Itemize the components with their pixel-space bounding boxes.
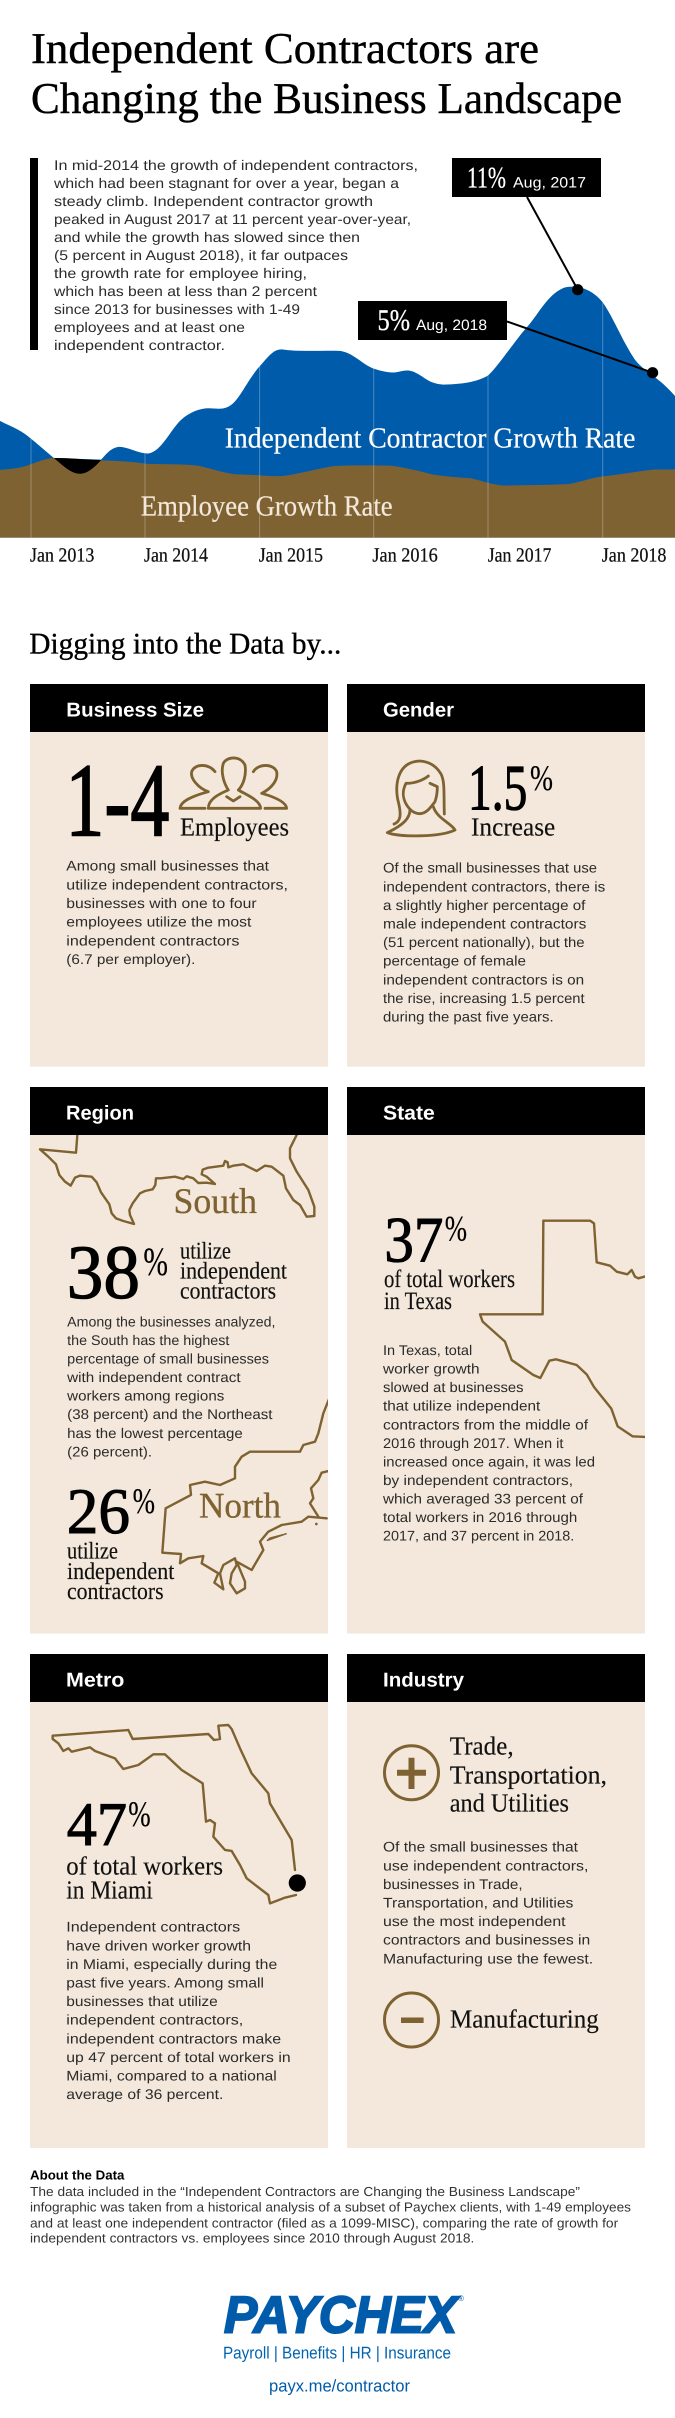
stat: 37%: %	[445, 1209, 467, 1249]
about the data: independent contractors vs. employees since 2010 through August 2018.	[30, 2231, 474, 2246]
panel: industry	[347, 1654, 645, 2148]
body text: Of the small businesses that	[383, 1839, 578, 1855]
body text: the South has the highest	[67, 1332, 230, 1348]
stat: 1-4: 1-4	[65, 742, 169, 859]
x axis labels	[30, 544, 666, 566]
stat: 26%: 26	[67, 1476, 130, 1548]
callout: 5% Aug 2018: 5%	[378, 304, 410, 337]
callout: 11% Aug 2017	[452, 158, 601, 295]
intro text with bar: since 2013 for businesses with 1-49	[54, 301, 300, 317]
body text: use the most independent	[383, 1913, 566, 1929]
icon: miami dot	[289, 1874, 306, 1892]
intro text with bar: which had been stagnant for over a year, began a	[53, 175, 399, 191]
body text: (26 percent).	[67, 1443, 152, 1459]
panel: region	[30, 1087, 330, 1634]
stat: 38%: %	[143, 1239, 168, 1284]
title: Independent Contractors are	[31, 24, 539, 73]
icon: plus circle	[384, 1746, 438, 1800]
body text: employees utilize the most	[66, 914, 252, 930]
stat: 38%: 38	[67, 1229, 140, 1315]
body text	[66, 1313, 275, 1459]
body text: during the past five years.	[383, 1008, 554, 1024]
intro text with bar: peaked in August 2017 at 11 percent year-over-year,	[54, 211, 411, 227]
body text: the rise, increasing 1.5 percent	[383, 990, 585, 1006]
panel: business size	[30, 684, 328, 1067]
body text: businesses in Trade,	[383, 1876, 523, 1892]
x axis labels: Jan 2014	[144, 544, 208, 566]
icon: three people	[180, 758, 287, 808]
body text: independent contractors make	[66, 2030, 281, 2046]
x axis labels: Jan 2016	[372, 544, 438, 566]
about the data: and at least one independent contractor (filed as a 1099-MISC), comparing the rate of growth for	[30, 2215, 619, 2230]
body text: in Miami, especially during the	[66, 1956, 277, 1972]
stat: 1.5%: 1.5	[468, 752, 527, 824]
body text	[66, 1919, 291, 2102]
stat label: utilize: contractors	[180, 1279, 276, 1305]
intro text with bar: employees and at least one	[54, 319, 245, 335]
body text: a slightly higher percentage of	[383, 897, 586, 913]
body text: percentage of small businesses	[67, 1350, 269, 1366]
chart areas	[0, 287, 675, 538]
body text	[382, 1342, 595, 1544]
map label: north: North	[199, 1486, 281, 1526]
body text: 2017, and 37 percent in 2018.	[383, 1528, 574, 1544]
panel: metro	[30, 1654, 328, 2148]
icon: minus circle	[384, 1993, 438, 2047]
panel heading: Industry	[383, 1669, 465, 1691]
stat label: total workers: of total workers	[384, 1266, 515, 1293]
panel heading: Region	[66, 1102, 134, 1124]
stat label: utilize	[67, 1539, 175, 1605]
stat label: increase: Increase	[471, 813, 555, 842]
title: Changing the Business Landscape	[31, 74, 622, 123]
stat label: utilize: utilize	[67, 1539, 118, 1565]
body text: slowed at businesses	[383, 1379, 524, 1395]
body text: worker growth	[382, 1361, 480, 1377]
panel: state	[347, 1087, 647, 1634]
label: trade transportation utilities: and Utilities	[450, 1789, 569, 1818]
stat label: utilize: independent	[67, 1559, 175, 1585]
intro text with bar: In mid-2014 the growth of independent contractors,	[54, 157, 418, 173]
body text: male independent contractors	[383, 916, 586, 932]
label: trade transportation utilities: Transportation,	[450, 1760, 607, 1789]
panel heading: Gender	[383, 699, 454, 721]
growth area chart	[0, 158, 675, 566]
label: manufacturing: Manufacturing	[450, 2005, 599, 2034]
x axis labels: Jan 2018	[602, 544, 666, 566]
intro text with bar: the growth rate for employee hiring,	[54, 265, 307, 281]
body text: Among the businesses analyzed,	[67, 1313, 276, 1329]
stat label: total workers	[66, 1852, 223, 1905]
about the data: The data included in the “Independent Contractors are Changing the Business Landscape”	[30, 2184, 580, 2199]
body text: increased once again, it was led	[383, 1453, 595, 1469]
body text: have driven worker growth	[66, 1937, 251, 1953]
map label: south: South	[174, 1181, 257, 1221]
body text	[383, 1839, 593, 1966]
body text: (51 percent nationally), but the	[383, 934, 585, 950]
series label: employee: Employee Growth Rate	[141, 490, 393, 522]
about the data: infographic was taken from a historical analysis of a subset of Paychex clients, with 1-49 employees	[30, 2200, 632, 2215]
body text: workers among regions	[66, 1388, 224, 1404]
body text: independent contractors is on	[383, 971, 584, 987]
x axis labels: Jan 2017	[488, 544, 551, 566]
callout: 11% Aug 2017: Aug, 2017	[513, 174, 586, 192]
body text: independent contractors	[66, 932, 239, 948]
about the data: About the Data	[30, 2167, 125, 2182]
body text: past five years. Among small	[66, 1974, 264, 1990]
body text: use independent contractors,	[383, 1857, 588, 1873]
body text: Manufacturing use the fewest.	[383, 1950, 593, 1966]
intro text with bar: steady climb. Independent contractor growth	[54, 193, 373, 209]
tagline: Payroll | Benefits | HR | Insurance	[223, 2343, 451, 2362]
body text: 2016 through 2017. When it	[383, 1435, 564, 1451]
intro text with bar: and while the growth has slowed since then	[54, 229, 360, 245]
map: north	[162, 1397, 330, 1593]
logo: paychex: PAYCHEX	[224, 2287, 460, 2345]
panel: gender	[347, 684, 645, 1067]
body text: up 47 percent of total workers in	[66, 2049, 291, 2065]
body text	[383, 860, 605, 1024]
body text: Transportation, and Utilities	[383, 1894, 573, 1910]
body text: Independent contractors	[66, 1919, 240, 1935]
body text: total workers in 2016 through	[383, 1509, 577, 1525]
map: florida	[53, 1725, 296, 1903]
stat label: utilize	[180, 1239, 287, 1305]
section heading: Digging into the Data by...	[29, 627, 341, 660]
panel heading: Business Size	[66, 699, 204, 721]
body text: has the lowest percentage	[67, 1425, 243, 1441]
body text: independent contractors, there is	[383, 878, 605, 894]
body text: In Texas, total	[383, 1342, 472, 1358]
stat: 1.5%: %	[530, 758, 553, 798]
body text: utilize independent contractors,	[66, 876, 288, 892]
intro text with bar: independent contractor.	[54, 337, 225, 353]
year grid lines	[31, 290, 603, 538]
body text: (38 percent) and the Northeast	[67, 1406, 273, 1422]
intro text with bar: which has been at less than 2 percent	[53, 283, 317, 299]
series label: independent contractor: Independent Contractor Growth Rate	[225, 423, 635, 455]
url: payx.me/contractor	[269, 2377, 410, 2396]
body text: with independent contract	[66, 1369, 241, 1385]
map: south	[40, 1135, 314, 1224]
stat label: utilize: contractors	[67, 1579, 164, 1605]
stat: 26%: %	[133, 1481, 155, 1521]
stat label: total workers: in Miami	[66, 1876, 153, 1905]
logo: paychex: ®	[458, 2294, 464, 2303]
map: texas	[480, 1221, 647, 1437]
label: trade transportation utilities	[450, 1731, 607, 1818]
stat label: total workers	[384, 1266, 515, 1315]
callout: 11% Aug 2017: 11%	[467, 162, 506, 194]
body text: contractors and businesses in	[383, 1932, 590, 1948]
body text	[66, 858, 288, 967]
body text: which averaged 33 percent of	[382, 1491, 583, 1507]
stat label: total workers: of total workers	[66, 1852, 223, 1881]
label: trade transportation utilities: Trade,	[450, 1731, 514, 1760]
callout: 5% Aug 2018	[358, 301, 658, 378]
intro text with bar	[30, 157, 418, 353]
stat label: utilize: independent	[180, 1259, 287, 1285]
body text: contractors from the middle of	[383, 1416, 588, 1432]
title	[31, 24, 622, 123]
x axis labels: Jan 2015	[259, 544, 323, 566]
body text: businesses that utilize	[66, 1993, 218, 2009]
panel heading: State	[383, 1102, 435, 1124]
body text: by independent contractors,	[383, 1472, 573, 1488]
body text: Among small businesses that	[66, 858, 269, 874]
icon: woman	[387, 761, 455, 836]
intro text with bar: (5 percent in August 2018), it far outpaces	[54, 247, 348, 263]
about the data	[30, 2167, 632, 2246]
body text: that utilize independent	[383, 1398, 540, 1414]
callout: 5% Aug 2018: Aug, 2018	[416, 317, 487, 334]
body text: average of 36 percent.	[66, 2086, 223, 2102]
body text: percentage of female	[383, 953, 526, 969]
body text: Miami, compared to a national	[66, 2068, 277, 2084]
body text: independent contractors,	[66, 2012, 243, 2028]
stat: 47%: %	[128, 1794, 151, 1834]
stat: 37%: 37	[384, 1204, 443, 1276]
body text: Of the small businesses that use	[383, 860, 597, 876]
x axis labels: Jan 2013	[30, 544, 94, 566]
body text: (6.7 per employer).	[66, 951, 195, 967]
panel heading: Metro	[66, 1669, 124, 1691]
stat: 47%: 47	[67, 1791, 127, 1859]
stat label: total workers: in Texas	[384, 1288, 452, 1315]
body text: businesses with one to four	[66, 895, 257, 911]
stat label: utilize: utilize	[180, 1239, 231, 1265]
stat label: employees: Employees	[180, 813, 289, 842]
